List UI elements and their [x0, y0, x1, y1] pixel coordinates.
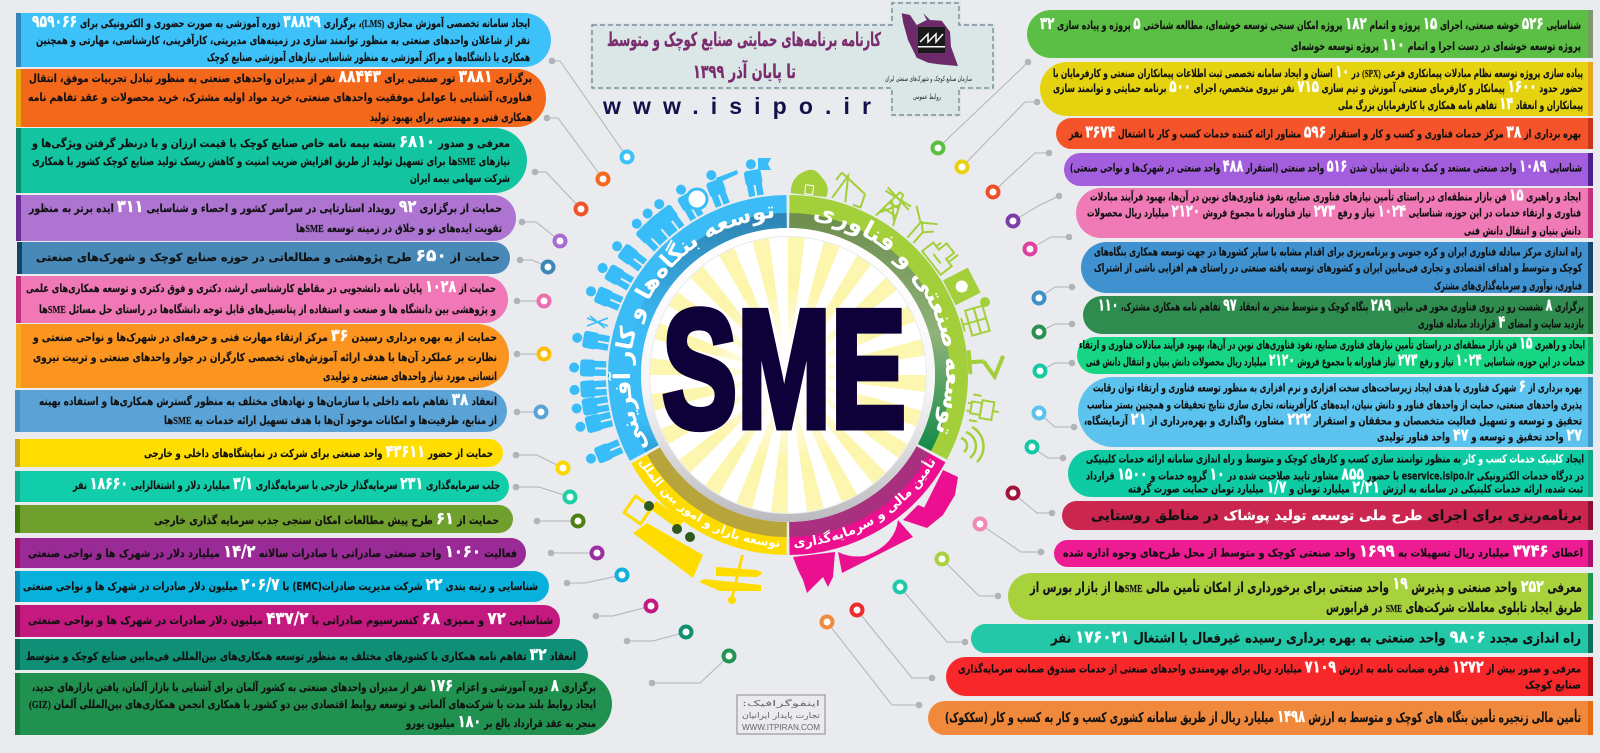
- panel: exhibitions: [15, 439, 503, 467]
- panel: technology towns: [1078, 376, 1593, 447]
- panel: industrial tours: [16, 67, 546, 127]
- panel: stock exchange: معرفی ۲۵۲ واحد صنعتی و پذیرش: [1413, 577, 1595, 597]
- panel: rural clothing plan: برنامه‌ریزی برای اجرای طرح ملی توسعه تولید پوشاک در مناطق روستایی: [1091, 508, 1582, 524]
- panel: LMS training: نفر از شاغلان واحدهای صنعتی به منظور توانمند سازی در زمینه‌های مدیریتی، کارآفرینی، کارشناسی، مهارتی و همچنین: [36, 33, 530, 47]
- panel: insurance package: معرفی و صدور ۶۸۱۰ بسته بیمه نامه خاص صنایع کوچک با قیمت ارزان و با درنظر گرفتن ویژگی‌ها و: [31, 132, 510, 152]
- credit box: تجارت پایدار ایرانیان: [742, 711, 820, 720]
- panel: foreign investment: [15, 471, 509, 502]
- panel: technology service centers: بهره برداری از ۳۸ مرکز خدمات فناوری و کسب و کار و استقرار ۵۹۶ مشاور ارائه کننده خدمات کسب و کار با اشتغال ۳۶۷۴ نفر: [1068, 122, 1581, 142]
- heading: date: تا پایان آذر ۱۳۹۹: [693, 59, 796, 83]
- panel: rural clothing plan: [1062, 501, 1593, 530]
- panel: skill centers: [16, 324, 509, 388]
- ring label: workforce and enterprise development: توسعه بنگاه‌ها و کار آفرینی: [608, 206, 774, 448]
- panel: business clinic: [1068, 450, 1593, 498]
- panel: research projects: حمایت از ۶۵۰ طرح پژوهشی و مطالعاتی در حوزه صنایع کوچک و شهرک‌های صنعتی: [36, 246, 500, 266]
- panel: industrial tours: برگزاری ۳۸۸۱ تور صنعتی برای ۸۸۴۴۳ نفر از مدیران واحدهای صنعتی به منظور تبادل تجربیات موفق، انتقال: [29, 67, 532, 87]
- ring label: finance and investment: تأمین مالی و سرمایه‌گذاری: [794, 458, 935, 550]
- panel: guarantees: [946, 657, 1593, 696]
- panel: skill centers: نظارت بر عملکرد آن‌ها با هدف ارائه آموزش‌های تخصصی کارگران در جوار واحدهای صنعتی و تربیت نیروی: [33, 350, 497, 364]
- header banner: [590, 1, 995, 117]
- panel: research projects: [17, 242, 510, 274]
- panel: industrial tours: همکاری فنی و مهندسی برای بهبود تولید: [370, 111, 532, 124]
- panel: exporting units: فعالیت ۱۰۶۰ واحد صنعتی صادراتی با صادرات سالانه ۱۴/۲ میلیارد دلار در شهرک ها و نواحی صنعتی: [28, 542, 517, 562]
- ring: yellow sector: [646, 451, 787, 538]
- panel: feasibility studies: حمایت از ۶۱ طرح پیش مطالعات امکان سنجی جذب سرمایه گذاری خارجی: [154, 509, 499, 529]
- panel: guarantees: صنایع کوچک: [1525, 678, 1581, 692]
- panel: stock exchange: ۱۹: [1392, 574, 1408, 594]
- inner white bevel ring: [645, 232, 931, 518]
- logo: Iran map with factory: سازمان صنایع کوچک و شهرک‌های صنعتی ایران: [885, 75, 972, 83]
- panel: Germany courses: ایجاد روابط بلند مدت با شرکت‌های آلمانی و توسعه روابط اقتصادی بین دو کشور با همکاری انجمن همکاری‌های بین‌المللی آلمان (GIZ): [29, 697, 596, 711]
- panel: Germany courses: [15, 673, 612, 735]
- panel: export consortiums: [15, 605, 560, 637]
- panel: tech market second entry: [1077, 334, 1593, 374]
- panel: LMS training: همکاری با دانشگاه‌ها و مراکز آموزشی به منظور شناسایی نیازهای آموزشی صنایع کوچک: [207, 50, 530, 64]
- panel: regional tech market: [1076, 186, 1593, 238]
- panel: dissertations: و پژوهشی بین دانشگاه ها و صنعت و استفاده از پتانسیل‌های قابل توجه دانشگاه‌ها در راستای حل مسائل SMEها: [39, 303, 496, 316]
- panel: supply chain finance: [928, 701, 1593, 735]
- panel: technology meetings: [1083, 296, 1593, 334]
- panel: dissertations: حمایت از ۱۰۲۸ پایان نامه دانشجویی در مقاطع کارشناسی ارشد، دکتری و فوق دکتری و توسعه همکاری‌های علمی: [26, 277, 496, 297]
- panel: clusters: [1027, 10, 1593, 58]
- panel: LMS training: [16, 12, 551, 67]
- SME title: SME: [662, 277, 906, 463]
- ring label: industry and technology: توسعه صنعتی و فناوری: [814, 210, 956, 434]
- icons: truck and signpost around yellow sector: [624, 496, 763, 604]
- panel: international MoUs: [15, 639, 588, 670]
- panel: exhibitions: حمایت از حضور ۴۳۶۱۱ واحد صنعتی برای شرکت در نمایشگاه‌های داخلی و خارجی: [144, 442, 493, 462]
- ring: pink sector: [789, 450, 931, 538]
- panel: stock exchange: SMEها از بازار بورس از: [1030, 580, 1158, 596]
- heading: title: کارنامه برنامه‌های حمایتی صنایع کوچک و متوسط: [607, 29, 882, 51]
- panel: technology towns: ۲۷ واحد تحقیق و توسعه و ۴۷ واحد فناور تولیدی: [1377, 426, 1582, 446]
- panel: insurance package: نیازهای SMEها برای تسهیل تولید از طریق افزایش ضریب امنیت و کاهش ریسک تولید صنایع کوچک کشور با همکاری: [32, 155, 510, 168]
- panel: clusters: شناسایی ۵۲۶ خوشه صنعتی، اجرای ۱۵ پروژه و اتمام ۱۸۲ پروژه امکان سنجی توسعه خوشه‌ای، مطالعه شناختی ۵ پروژه و پیاده سازی ۳۲: [1040, 14, 1581, 34]
- panel: industrial tours: فناوری، آشنایی با عوامل موفقیت واحدهای صنعتی، خرید مواد اولیه مشترک، خرید محصولات و عقد تفاهم نامه: [28, 90, 532, 104]
- website address: www.isipo.ir: [602, 93, 871, 119]
- credit box: WWW.ITPIRAN.COM: [742, 723, 820, 732]
- panel: domestic MoUs: انعقاد ۳۸ تفاهم نامه داخلی با سازمان‌ها و نهادهای مختلف به منظور گسترش همکاری‌ها و استفاده بهینه: [39, 390, 497, 410]
- panel: stock exchange: واحد صنعتی برای برخورداری از امکان تأمین مالی: [1146, 579, 1389, 596]
- panel: export consortiums: شناسایی ۷۲ و ممیزی ۶۸ کنسرسیوم صادراتی با ۴۳۷/۲ میلیون دلار صادرات در شهرک ها و نواحی صنعتی: [28, 609, 553, 629]
- panel: knowledge-based units: شناسایی ۱۰۸۹ واحد صنعتی مستعد و کمک به دانش بنیان شدن ۵۱۶ واحد صنعتی (استقرار ۴۸۸ واحد صنعتی در شهرک‌ها و نواحی صنعتی): [1070, 156, 1582, 176]
- panel: insurance package: شرکت سهامی بیمه ایران: [410, 172, 510, 185]
- panel: business clinic: ایجاد کلینیک خدمات کسب و کار به منظور توانمند سازی کسب و کارهای کوچک و متوسط و راه اندازی سامانه ارائه خدمات کلینیکی: [1086, 452, 1584, 466]
- panel: dissertations: [16, 276, 508, 323]
- panel: subcontracting: حضور حدود ۱۶۰۰ پیمانکار و کارفرمای صنعتی، آموزش و تیم سازی ۷۱۵ نفر نیروی متخصص، اجرای ۵۰۰ برنامه حمایتی و توانمند سازی: [1053, 77, 1583, 97]
- panel: domestic MoUs: [15, 390, 507, 432]
- ring label: market and international affairs: توسعه بازار و امور بین الملل: [638, 461, 780, 549]
- panel: guarantees: معرفی و صدور بیش از ۱۲۷۲ فقره ضمانت نامه به ارزش ۷۱۰۹ میلیارد ریال برای بهره‌مندی واحدهای صنعتی از خدمات صندوق ضمانت سرمایه‌گذاری: [958, 658, 1581, 678]
- panel: Germany courses: منجر به عقد قرارداد بالغ بر ۱۸۰ میلیون یورو: [405, 712, 596, 732]
- ring: blue sector: [624, 212, 787, 453]
- ring: green sector: [789, 212, 952, 452]
- panel: EMC: شناسایی و رتبه بندی ۲۲ شرکت مدیریت صادرات(EMC) با ۲۰۶/۷ میلیون دلار صادرات در شهرک ها و نواحی صنعتی: [23, 575, 538, 595]
- panel: feasibility studies: [15, 505, 513, 533]
- panel: domestic MoUs: از منابع، ظرفیت‌ها و امکانات موجود آن‌ها با هدف تسهیل ارائه خدمات به SMEها: [164, 413, 497, 427]
- icons: people around blue sector: [569, 158, 771, 468]
- icons: industry around green sector: [792, 169, 1005, 462]
- panel: startup events: [16, 195, 516, 241]
- credit box: اینفوگرافیک:: [742, 698, 820, 708]
- panel: startup events: تقویت ایده‌های نو و خلاق در زمینه توسعه SMEها: [296, 222, 502, 235]
- panel: technology exchange center: [1081, 242, 1593, 293]
- panel: facilities: اعطای ۳۷۴۶ میلیارد ریال تسهیلات به ۱۶۹۹ واحد صنعتی کوچک و متوسط از محل طرح‌های وجوه اداره شده: [1063, 542, 1583, 562]
- panel: exporting units: [15, 538, 526, 568]
- icons: city skyline around pink sector: [793, 470, 958, 593]
- panel: restarted units: راه اندازی مجدد ۹۸۰۶ واحد صنعتی به بهره برداری رسیده غیرفعال با اشتغال ۱۷۶۰۲۱ نفر: [1050, 628, 1581, 648]
- panel: foreign investment: جلب سرمایه‌گذاری ۲۳۱ سرمایه‌گذار خارجی با سرمایه‌گذاری ۳/۱ میلیارد دلار و اشتغالزایی ۱۸۶۶۰ نفر: [72, 474, 500, 494]
- panel: EMC: [15, 571, 549, 602]
- panel: knowledge-based units: [1064, 153, 1593, 186]
- panel: skill centers: حمایت از به بهره برداری رسیدن ۳۶ مرکز ارتقاء مهارت فنی و حرفه‌ای در شهرک‌ها و نواحی صنعتی و: [32, 326, 497, 346]
- panel: restarted units: [971, 624, 1593, 653]
- panel: insurance package: [16, 128, 527, 193]
- connectors and dots: left side: [513, 58, 734, 686]
- panel: skill centers: انسانی مورد نیاز واحدهای صنعتی و تولیدی: [323, 370, 497, 383]
- panel: subcontracting: [1040, 62, 1593, 116]
- logo: Iran map with factory: [885, 13, 972, 101]
- credit box: [737, 695, 825, 734]
- panel: Germany courses: برگزاری ۸ دوره آموزشی و اعزام ۱۷۶ نفر از مدیران واحدهای صنعتی به کشور آلمان برای آشنایی با بازار آلمان، یافتن بازارهای جدید،: [32, 676, 596, 696]
- logo: Iran map with factory: روابط عمومی: [913, 93, 941, 101]
- panel: LMS training: ایجاد سامانه تخصصی آموزش مجازی (LMS)، برگزاری ۳۸۸۲۹ دوره آموزشی به صورت حضوری و الکترونیکی برای ۹۵۹۰۶۶: [32, 12, 530, 32]
- panel: stock exchange: [1008, 573, 1593, 620]
- connectors and dots: right side: [822, 59, 1077, 708]
- panel: international MoUs: انعقاد ۳۲ تفاهم نامه همکاری با کشورهای مختلف به منظور توسعه همکاری‌های بین‌المللی فی‌مابین صنایع کوچک و متوسط: [26, 645, 576, 665]
- center disc with rays: [650, 237, 926, 513]
- panel: technology service centers: [1056, 118, 1593, 149]
- panel: startup events: حمایت از برگزاری ۹۲ رویداد استارتاپی در سراسر کشور و احصاء و شناسایی ۳۱۱ ایده برتر به منظور: [28, 197, 502, 217]
